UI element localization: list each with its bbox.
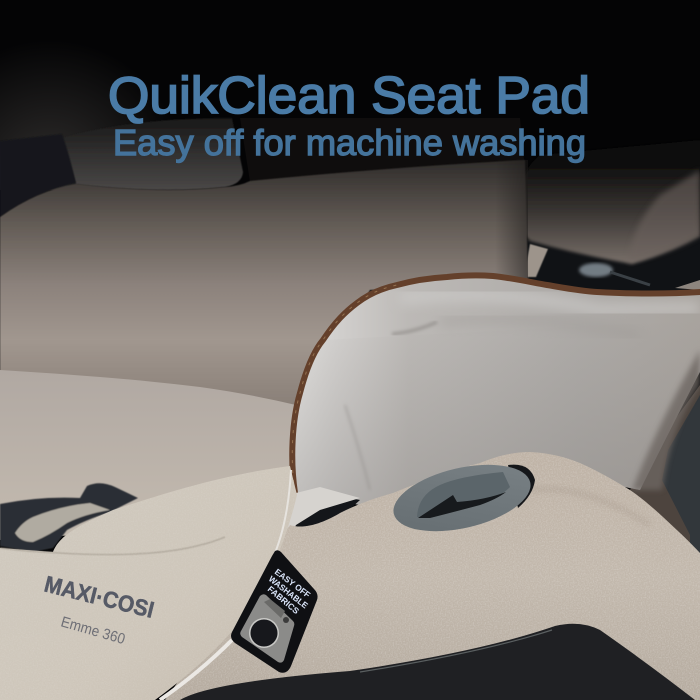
harness buckle [0,483,138,552]
headrest fold [628,170,700,262]
cushion darker top strip [530,489,650,525]
pad corner fold [283,487,360,550]
pale buckle highlight [579,263,613,277]
strap line [610,272,650,285]
buckle pad [15,503,110,542]
front fold line [0,537,225,555]
back cushion right edge shade [495,160,528,290]
pad vertical wrinkle [345,405,370,490]
ring opening [417,472,510,518]
back cushion [0,160,528,420]
belt guide ring [387,453,537,543]
washing label tag: FABRICS [266,584,302,616]
base highlight [360,630,552,672]
piped brown edge [292,275,700,493]
model name: Emme 360 [59,614,127,648]
dark strap area [520,235,700,295]
icon: washing machine [240,594,294,663]
stitched highlight [292,285,397,493]
ring shadow [508,465,535,508]
buckle body [0,483,138,552]
seat bottom [0,370,296,540]
tag text: EASY OFF [273,567,312,600]
armrest fabric cushion [160,450,700,700]
upper right headrest [516,140,700,295]
dim band behind title [240,118,525,182]
brand logo: MAXI·COSI [42,571,157,623]
tag body [231,550,318,673]
lower right shadow [662,392,700,560]
cushion fabric grain [160,450,700,700]
washing label tag [231,550,318,673]
gap shadow [285,497,360,550]
left glow behind title [0,40,190,190]
title: QuikClean Seat Pad [108,67,590,125]
pad right edge shadow [632,350,700,490]
subtitle: Easy off for machine washing [113,122,586,163]
washing label tag: WASHABLE [267,574,310,611]
front face [0,466,297,700]
pad top rim light [400,295,700,310]
right beige tip [675,280,700,290]
ring outer [387,453,537,543]
pad lower shade [292,320,700,505]
headrest cushion [516,140,700,264]
front pad with logo [0,460,300,700]
beige strip [524,244,548,277]
cushion body [165,452,700,700]
washable seat pad flap [292,275,700,505]
pad fabric [292,275,700,505]
lower plastic base [180,624,695,700]
pad crease [392,322,437,334]
headrest centre panel [62,118,243,190]
white piping [160,640,232,700]
left arm rest [0,134,76,217]
ring slot [418,492,506,518]
front fabric grain [210,542,211,543]
